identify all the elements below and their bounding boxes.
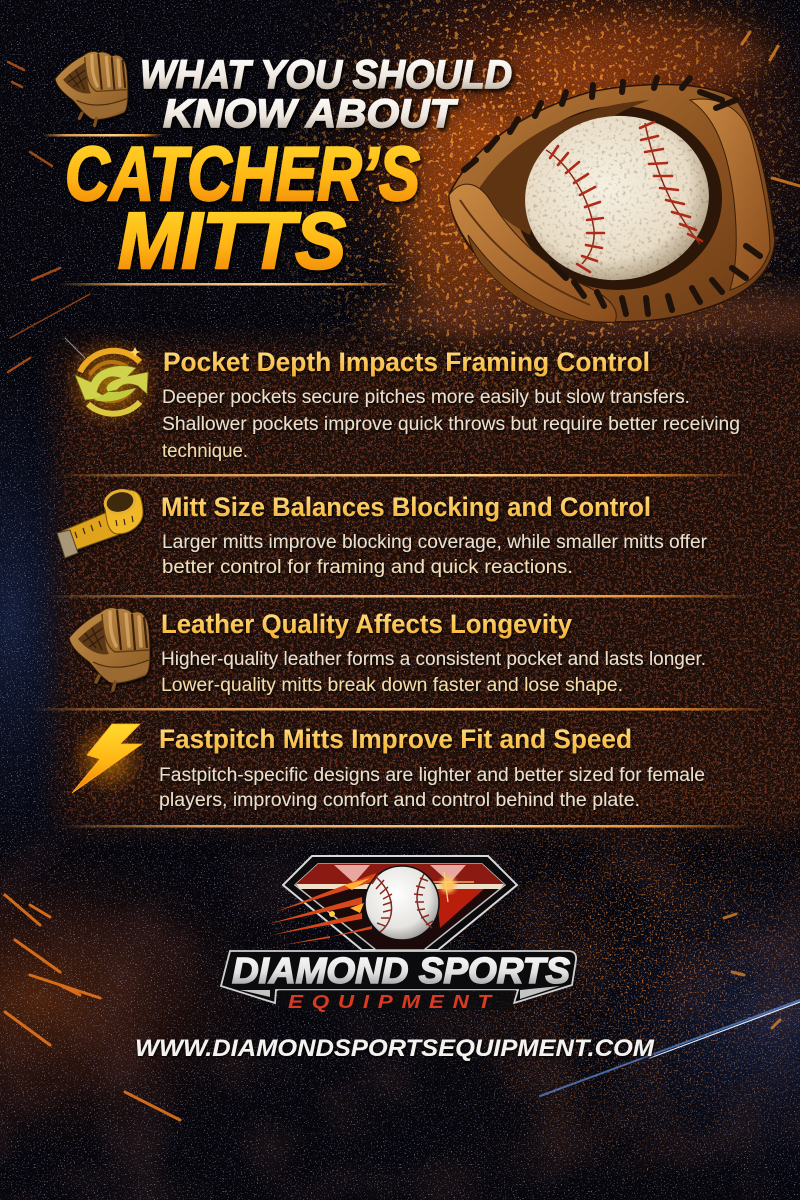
lacing: [464, 78, 760, 314]
mitt pocket: [514, 106, 722, 290]
body text: better control for framing and quick reactions.: [162, 557, 573, 578]
body text: Fastpitch-specific designs are lighter and better sized for female: [159, 765, 705, 786]
icon: lightning bolt: [70, 720, 146, 796]
logo speed flames: [268, 873, 376, 945]
heading: Pocket Depth Impacts Framing Control: [163, 347, 650, 377]
panel: mitt size: [57, 487, 708, 578]
icon: leather glove: [69, 608, 150, 690]
icon: rotating arrows: [63, 335, 159, 431]
body text: [162, 387, 740, 462]
body text: Deeper pockets secure pitches more easily but slow transfers.: [162, 387, 690, 408]
title line: mitts: MITTS: [118, 196, 346, 285]
mitt body: [449, 84, 775, 322]
thumb lobe: [449, 184, 616, 322]
panel: fastpitch: [70, 720, 705, 811]
heading: Leather Quality Affects Longevity: [161, 609, 572, 639]
logo: diamond sports equipment: [221, 856, 576, 1012]
logo subline: EQUIPMENT: [288, 992, 500, 1012]
body text: Lower-quality mitts break down faster and lose shape.: [161, 675, 623, 696]
body text: [161, 649, 706, 696]
title line: what you should: WHAT YOU SHOULD: [140, 53, 512, 97]
logo banner: [221, 951, 576, 1010]
section dividers: [28, 474, 773, 828]
baseball: [517, 107, 717, 289]
mitt with baseball: [449, 78, 775, 322]
title line: know about: KNOW ABOUT: [163, 92, 459, 136]
icon: tape measure: [57, 487, 143, 558]
body text: Shallower pockets improve quick throws but require better receiving: [162, 414, 740, 435]
right finger: [690, 99, 770, 290]
logo diamond: [283, 856, 517, 950]
body text: [159, 765, 705, 811]
logo baseball: [365, 866, 439, 940]
body text: [162, 532, 708, 578]
panel: leather quality: [69, 608, 706, 696]
panel: pocket depth: [63, 335, 740, 462]
icon: small glove: [55, 51, 128, 126]
title: [65, 53, 512, 285]
heading: Mitt Size Balances Blocking and Control: [161, 492, 651, 522]
body text: technique.: [162, 441, 248, 462]
body text: players, improving comfort and control behind the plate.: [159, 790, 640, 811]
title line: catcher's: CATCHER’S: [65, 132, 420, 217]
website url: WWW.DIAMONDSPORTSEQUIPMENT.COM: [135, 1035, 655, 1062]
heading: Fastpitch Mitts Improve Fit and Speed: [159, 724, 632, 754]
body text: Higher-quality leather forms a consistent pocket and lasts longer.: [161, 649, 706, 670]
body text: Larger mitts improve blocking coverage, while smaller mitts offer: [162, 532, 708, 553]
title flare lines: [42, 134, 403, 286]
logo wordmark: DIAMOND SPORTS: [232, 950, 570, 991]
